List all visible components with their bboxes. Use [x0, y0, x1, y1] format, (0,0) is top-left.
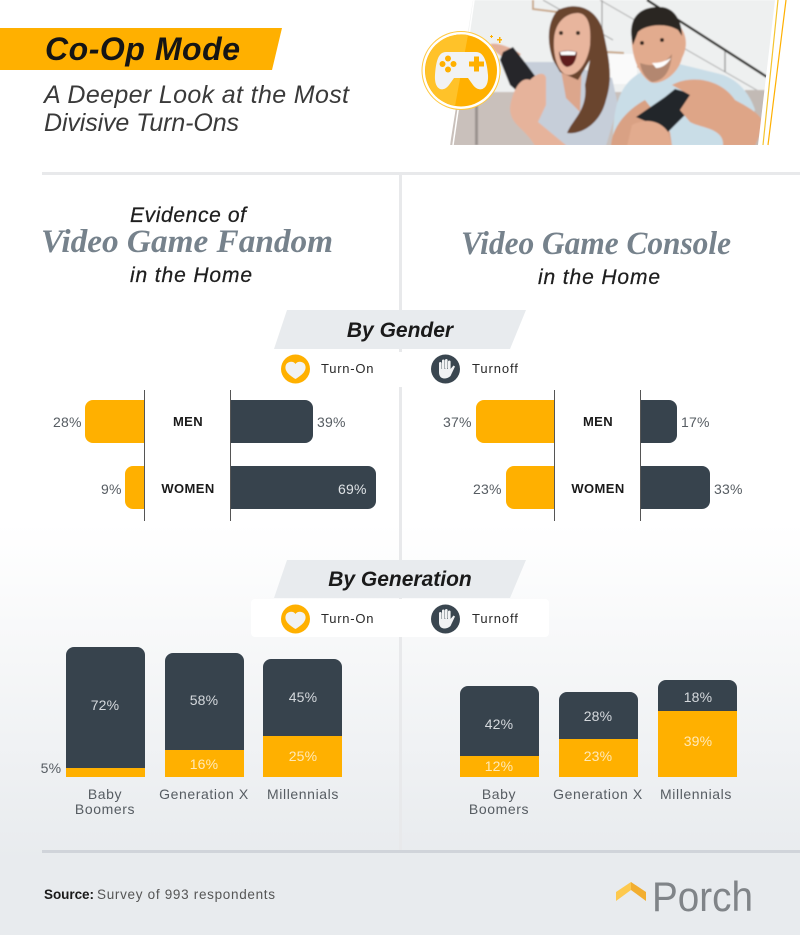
left column heading — [41, 204, 333, 287]
man — [613, 63, 755, 146]
chart: gender, fandom: 39% — [317, 414, 346, 430]
subtitle: A Deeper Look at the Most — [42, 81, 350, 109]
chart: generation, fandom: Baby — [88, 786, 122, 802]
chart: generation, console: 18% — [684, 689, 712, 705]
chart: generation, fandom: 58% — [190, 692, 218, 708]
icon: game controller badge — [422, 32, 502, 110]
source note: Source: — [44, 887, 94, 902]
chart: generation, fandom: 16% — [190, 756, 218, 772]
icon: hand — [431, 354, 460, 384]
generation legend: Turn-On — [321, 611, 374, 626]
left column heading: Evidence of — [130, 204, 248, 227]
chart: generation, fandom: Generation X — [159, 786, 249, 802]
chart: gender, console: 33% — [714, 481, 743, 497]
chart: gender, console: WOMEN — [571, 481, 625, 496]
generation legend — [251, 599, 549, 637]
right column heading: Video Game Console — [461, 226, 731, 262]
chart: generation, console: Millennials — [660, 786, 732, 802]
Porch logo: Porch — [652, 873, 753, 920]
icon: heart — [281, 604, 310, 634]
chart: gender, fandom: MEN — [173, 414, 203, 429]
chart: generation, fandom: 5% — [41, 760, 61, 776]
left column heading: Video Game Fandom — [41, 224, 333, 260]
chart: generation, fandom: 72% — [91, 697, 119, 713]
chart: gender, fandom: 28% — [53, 414, 82, 430]
subtitle — [42, 81, 350, 137]
by generation heading — [274, 560, 526, 598]
photo of couple playing video games — [445, 0, 780, 146]
chart: generation, console: 28% — [584, 708, 612, 724]
right column heading: in the Home — [538, 266, 660, 289]
source note: Survey of 993 respondents — [97, 887, 275, 902]
chart: gender, fandom: 9% — [101, 481, 122, 497]
generation legend: Turnoff — [472, 611, 519, 626]
by gender heading: By Gender — [347, 319, 455, 342]
title banner: Co-Op Mode — [45, 31, 240, 67]
chart: generation, fandom: Millennials — [267, 786, 339, 802]
chart: generation, console — [460, 680, 737, 817]
chart: gender, console: MEN — [583, 414, 613, 429]
chart: generation, console: 39% — [684, 733, 712, 749]
left column heading: in the Home — [130, 264, 252, 287]
icon: hand — [431, 604, 460, 634]
chart: generation, fandom — [41, 647, 342, 817]
icon: heart — [281, 354, 310, 384]
title banner — [0, 28, 282, 70]
by gender heading — [274, 310, 526, 349]
dividers — [42, 172, 800, 853]
right column heading — [461, 226, 731, 289]
chart: gender, fandom — [53, 390, 376, 521]
chart: gender, console: 37% — [443, 414, 472, 430]
chart: gender, console: 23% — [473, 481, 502, 497]
gender legend — [270, 352, 530, 387]
chart: generation, console: 23% — [584, 748, 612, 764]
gender legend: Turn-On — [321, 361, 374, 376]
chart: gender, fandom: 69% — [338, 481, 367, 497]
by generation heading: By Generation — [328, 568, 472, 591]
chart: gender, console: 17% — [681, 414, 710, 430]
chart: generation, console: Boomers — [469, 801, 529, 817]
chart: generation, fandom: Boomers — [75, 801, 135, 817]
woman — [521, 62, 618, 146]
chart: generation, console: Baby — [482, 786, 516, 802]
chart: gender, console — [443, 390, 743, 521]
subtitle: Divisive Turn-Ons — [44, 109, 239, 137]
chart: gender, fandom: WOMEN — [161, 481, 215, 496]
chart: generation, console: 42% — [485, 716, 513, 732]
chart: generation, console: Generation X — [553, 786, 643, 802]
gender legend: Turnoff — [472, 361, 519, 376]
Porch logo — [616, 873, 753, 920]
sofa — [450, 92, 622, 145]
photo frame lines — [453, 0, 786, 145]
chart: generation, fandom: 45% — [289, 689, 317, 705]
chart: generation, fandom: 25% — [289, 748, 317, 764]
chart: generation, console: 12% — [485, 758, 513, 774]
